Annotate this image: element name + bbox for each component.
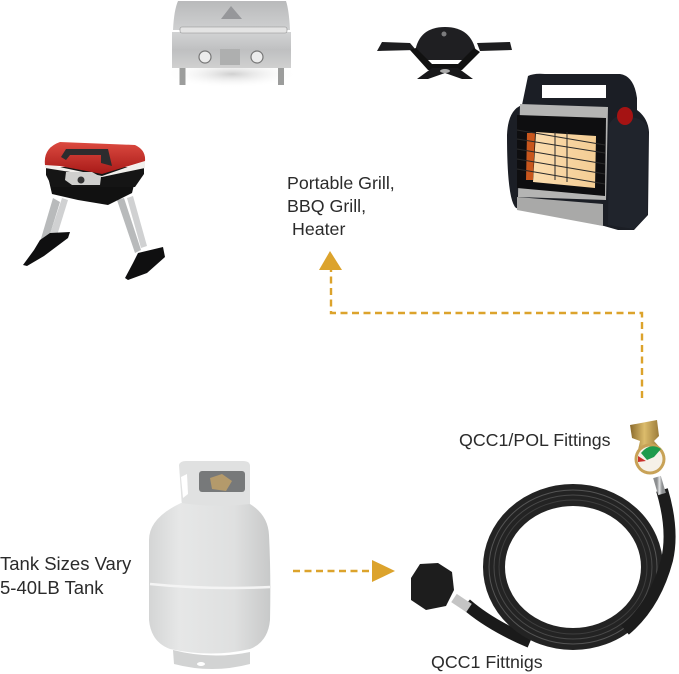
text: heater label: Heater [292, 219, 345, 239]
text: tank range: 5-40LB Tank [0, 577, 104, 598]
icon: red portable grill on legs [23, 142, 165, 280]
arrow: dashed tank to hose [293, 560, 395, 582]
icon: propane tank [149, 461, 270, 669]
text: QCC1/POL fittings label: QCC1/POL Fittings [459, 430, 611, 450]
text: portable grill label: Portable Grill, [287, 173, 395, 193]
icon: propane heater [507, 74, 649, 230]
icon: hose with gauge and fittings [411, 420, 670, 644]
icon: stainless tabletop grill [166, 1, 298, 88]
arrow: dashed hose to appliances [319, 251, 642, 398]
text: tank sizes: Tank Sizes Vary [0, 553, 132, 574]
icon: black kettle grill [377, 27, 512, 79]
text: BBQ grill label: BBQ Grill, [287, 196, 366, 216]
text: QCC1 fittings label: QCC1 Fittnigs [431, 652, 543, 672]
